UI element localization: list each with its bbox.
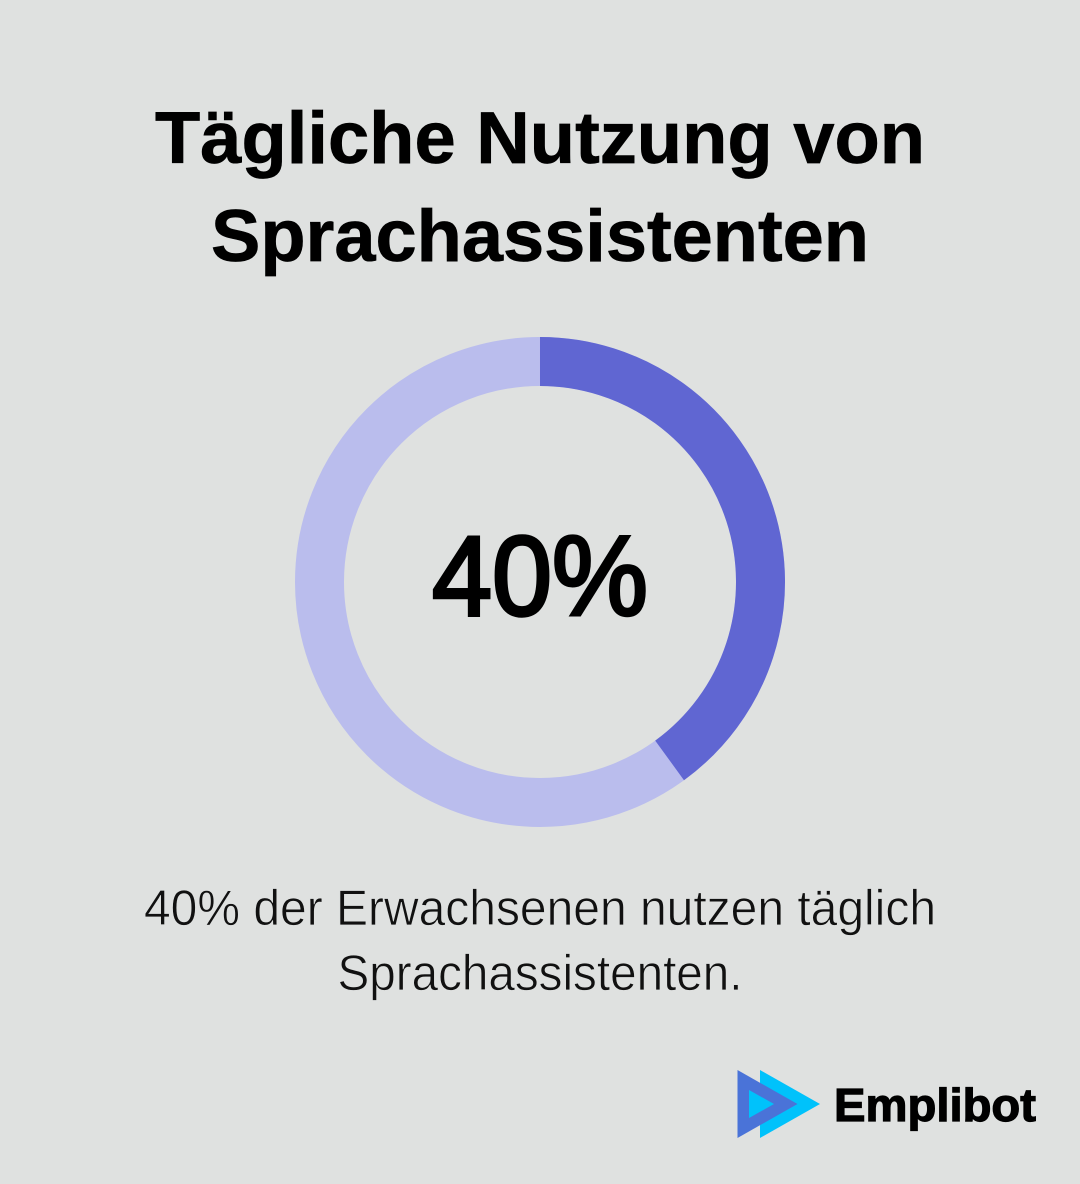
description text (144, 880, 936, 1001)
center value: 40% (432, 513, 648, 639)
donut chart (320, 362, 761, 802)
title (155, 98, 925, 277)
icon: play triangles (738, 1070, 820, 1138)
title: Tägliche Nutzung von (155, 98, 925, 179)
logo: Emplibot (738, 1070, 1036, 1138)
ring remainder: 60% (320, 362, 760, 802)
description text: Sprachassistenten. (338, 945, 742, 1001)
ring segment: 40% (540, 362, 761, 760)
title: Sprachassistenten (211, 196, 869, 277)
description text: 40% der Erwachsenen nutzen täglich (144, 880, 936, 936)
wordmark: Emplibot (834, 1079, 1036, 1131)
